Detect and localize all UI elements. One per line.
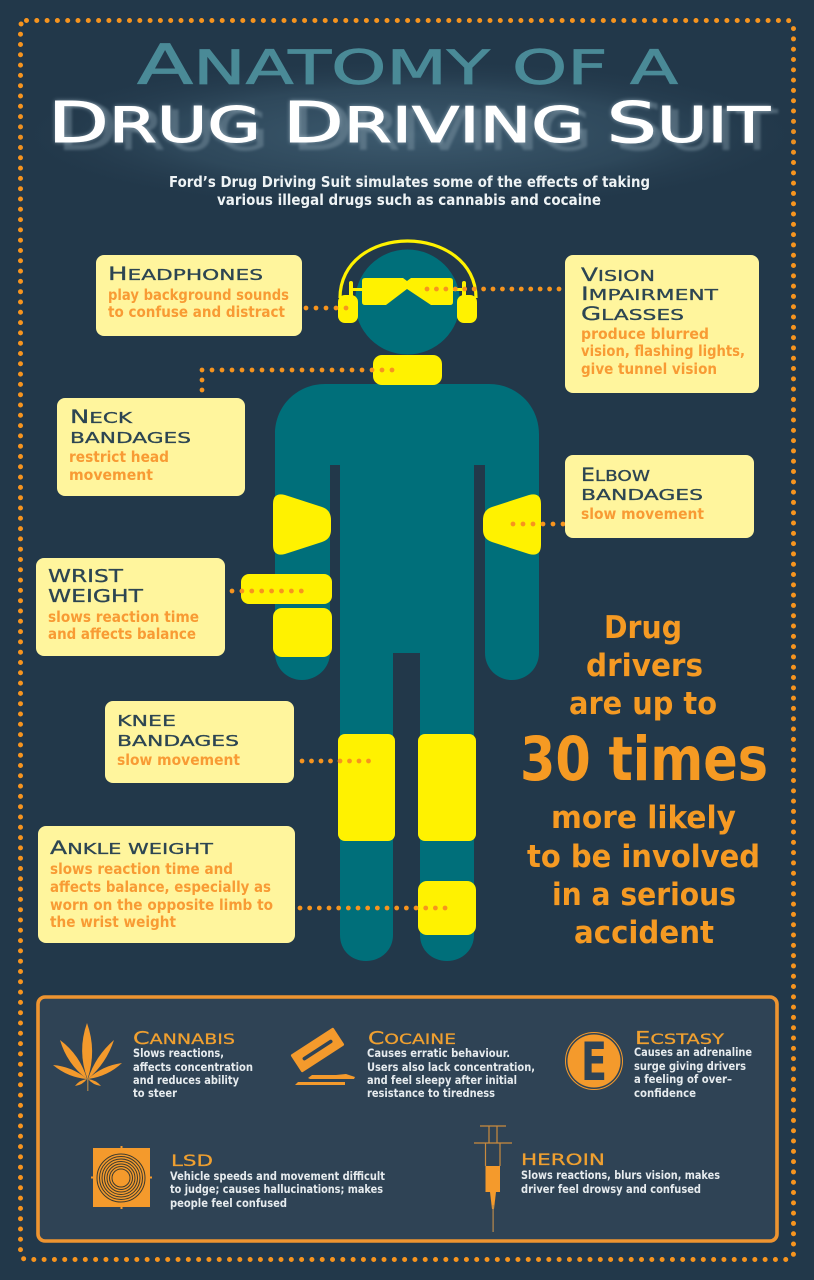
LSD text (170, 1151, 385, 1210)
heroin text: HEROIN (521, 1150, 605, 1169)
label: ankle weight: slows reaction time and (50, 861, 233, 878)
statistic callout: 30 times (520, 724, 768, 795)
label: vision impairment glasses: IMPAIRMENT (581, 284, 719, 305)
icon: LSD tab (91, 1146, 152, 1209)
cocaine text: Causes erratic behaviour. (367, 1046, 510, 1060)
figure wearing the suit (241, 241, 541, 961)
cannabis text: affects concentration (133, 1060, 253, 1074)
label: ankle weight: the wrist weight (50, 914, 176, 931)
label: headphones: H EADPHONES (108, 264, 263, 285)
label: elbow bandages: ELBOW (581, 465, 650, 486)
label: neck bandages: BANDAGES (70, 429, 191, 447)
subtitle (169, 173, 650, 209)
panel: drug effects (38, 997, 777, 1241)
connector: ankle (300, 906, 446, 910)
left knee bandage (338, 734, 395, 841)
label: wrist weight: slows reaction time (48, 609, 199, 626)
label: neck bandages (57, 398, 245, 496)
title shadow: DRUG DRIVING SUIT (56, 89, 779, 166)
right elbow bandage (483, 494, 541, 555)
right knee bandage (418, 734, 476, 841)
title glow (5, 57, 814, 213)
heroin text: driver feel drowsy and confused (521, 1182, 701, 1196)
title (5, 33, 814, 213)
cannabis text: to steer (133, 1086, 177, 1100)
label: knee bandages: BANDAGES (117, 732, 239, 750)
label: wrist weight (36, 558, 225, 656)
connector: wrist (232, 589, 302, 593)
label: ankle weight: affects balance, especially as (50, 879, 271, 896)
statistic callout: accident (574, 915, 714, 951)
panel frame (38, 997, 777, 1241)
cannabis text: C ANNABIS (133, 1029, 235, 1049)
label: neck bandages: movement (69, 467, 153, 484)
cannabis text (133, 1029, 253, 1100)
label: knee bandages: KNEE (117, 712, 176, 730)
statistic callout: in a serious (552, 877, 736, 913)
icon: ecstasy pill (566, 1032, 622, 1093)
ecstasy text (634, 1029, 752, 1100)
cocaine text: and feel sleepy after initial (367, 1073, 517, 1087)
cocaine text: resistance to tiredness (367, 1086, 495, 1100)
wrist weight (241, 574, 332, 604)
statistic callout: more likely (551, 800, 736, 836)
statistic callout: Drug (604, 610, 682, 646)
LSD text: LSD (171, 1151, 213, 1170)
statistic callout: are up to (569, 686, 717, 722)
label: headphones: play background sounds (108, 287, 289, 304)
label: headphones (96, 255, 302, 336)
label: neck bandages: N ECK (70, 407, 133, 428)
label: vision impairment glasses: give tunnel vision (581, 361, 717, 378)
connector: neck (202, 370, 392, 392)
label: elbow bandages: slow movement (581, 506, 704, 523)
cocaine text: Users also lack concentration, (367, 1060, 535, 1074)
LSD text: people feel confused (170, 1196, 287, 1210)
ecstasy text: Causes an adrenaline (634, 1045, 752, 1059)
icon: ecstasy pill: E (581, 1032, 607, 1093)
label: ankle weight: A NKLE WEIGHT (50, 838, 214, 859)
label: headphones: to confuse and distract (108, 304, 285, 321)
statistic callout: to be involved (527, 839, 760, 875)
label: knee bandages: slow movement (117, 752, 240, 769)
heroin text: Slows reactions, blurs vision, makes (521, 1168, 720, 1182)
LSD text: Vehicle speeds and movement difficult (170, 1169, 385, 1183)
label: wrist weight: and affects balance (48, 626, 196, 643)
left elbow bandage (273, 494, 331, 555)
label: vision impairment glasses: G LASSES (581, 304, 684, 325)
cannabis text: and reduces ability (133, 1073, 239, 1087)
label: elbow bandages (565, 455, 754, 538)
vision impairment glasses (349, 278, 466, 305)
icon: razor blade and powder (290, 1027, 355, 1085)
cannabis text: Slows reactions, (133, 1046, 224, 1060)
label: ankle weight: worn on the opposite limb to (50, 897, 273, 914)
icon: cannabis leaf (53, 1023, 122, 1091)
label: elbow bandages: BANDAGES (581, 486, 703, 504)
ecstasy text: E CSTASY (635, 1029, 725, 1049)
ecstasy text: confidence (634, 1086, 696, 1100)
label: ankle weight (38, 826, 295, 943)
figure body (275, 384, 539, 961)
title line 1: A NATOMY OF A (137, 33, 678, 97)
cocaine text (367, 1029, 535, 1100)
subtitle: various illegal drugs such as cannabis and cocaine (217, 191, 601, 209)
label: wrist weight: WEIGHT (48, 586, 144, 607)
label: neck bandages: restrict head (69, 449, 169, 466)
headphones (338, 241, 477, 323)
ecstasy text: surge giving drivers (634, 1059, 746, 1073)
heroin text (521, 1150, 720, 1196)
ecstasy text: a feeling of over– (634, 1072, 732, 1086)
icon: syringe (474, 1126, 512, 1232)
title line 2: D RUG D RIVING S UIT (48, 91, 772, 156)
subtitle: Ford’s Drug Driving Suit simulates some of the effects of taking (169, 173, 650, 191)
connector: headphones (306, 306, 347, 310)
label: vision impairment glasses: V ISION (581, 265, 655, 286)
label: vision impairment glasses: produce blurred (581, 326, 709, 343)
connector: elbow (513, 522, 564, 526)
statistic callout (520, 610, 768, 951)
neck bandage (373, 355, 442, 385)
connector: knee (302, 759, 369, 763)
connector: glasses (427, 287, 560, 291)
label: vision impairment glasses: vision, flashing lights, (581, 343, 745, 360)
hand bandage (273, 608, 332, 657)
ankle weight (418, 881, 476, 935)
figure head (355, 250, 460, 354)
LSD text: to judge; causes hallucinations; makes (170, 1182, 383, 1196)
title line 2 glow: D RUG D RIVING S UIT (48, 91, 772, 156)
label: vision impairment glasses (565, 255, 759, 393)
cocaine text: C OCAINE (368, 1029, 456, 1049)
statistic callout: drivers (586, 648, 703, 684)
label: knee bandages (105, 701, 294, 783)
label: wrist weight: WRIST (48, 566, 124, 587)
